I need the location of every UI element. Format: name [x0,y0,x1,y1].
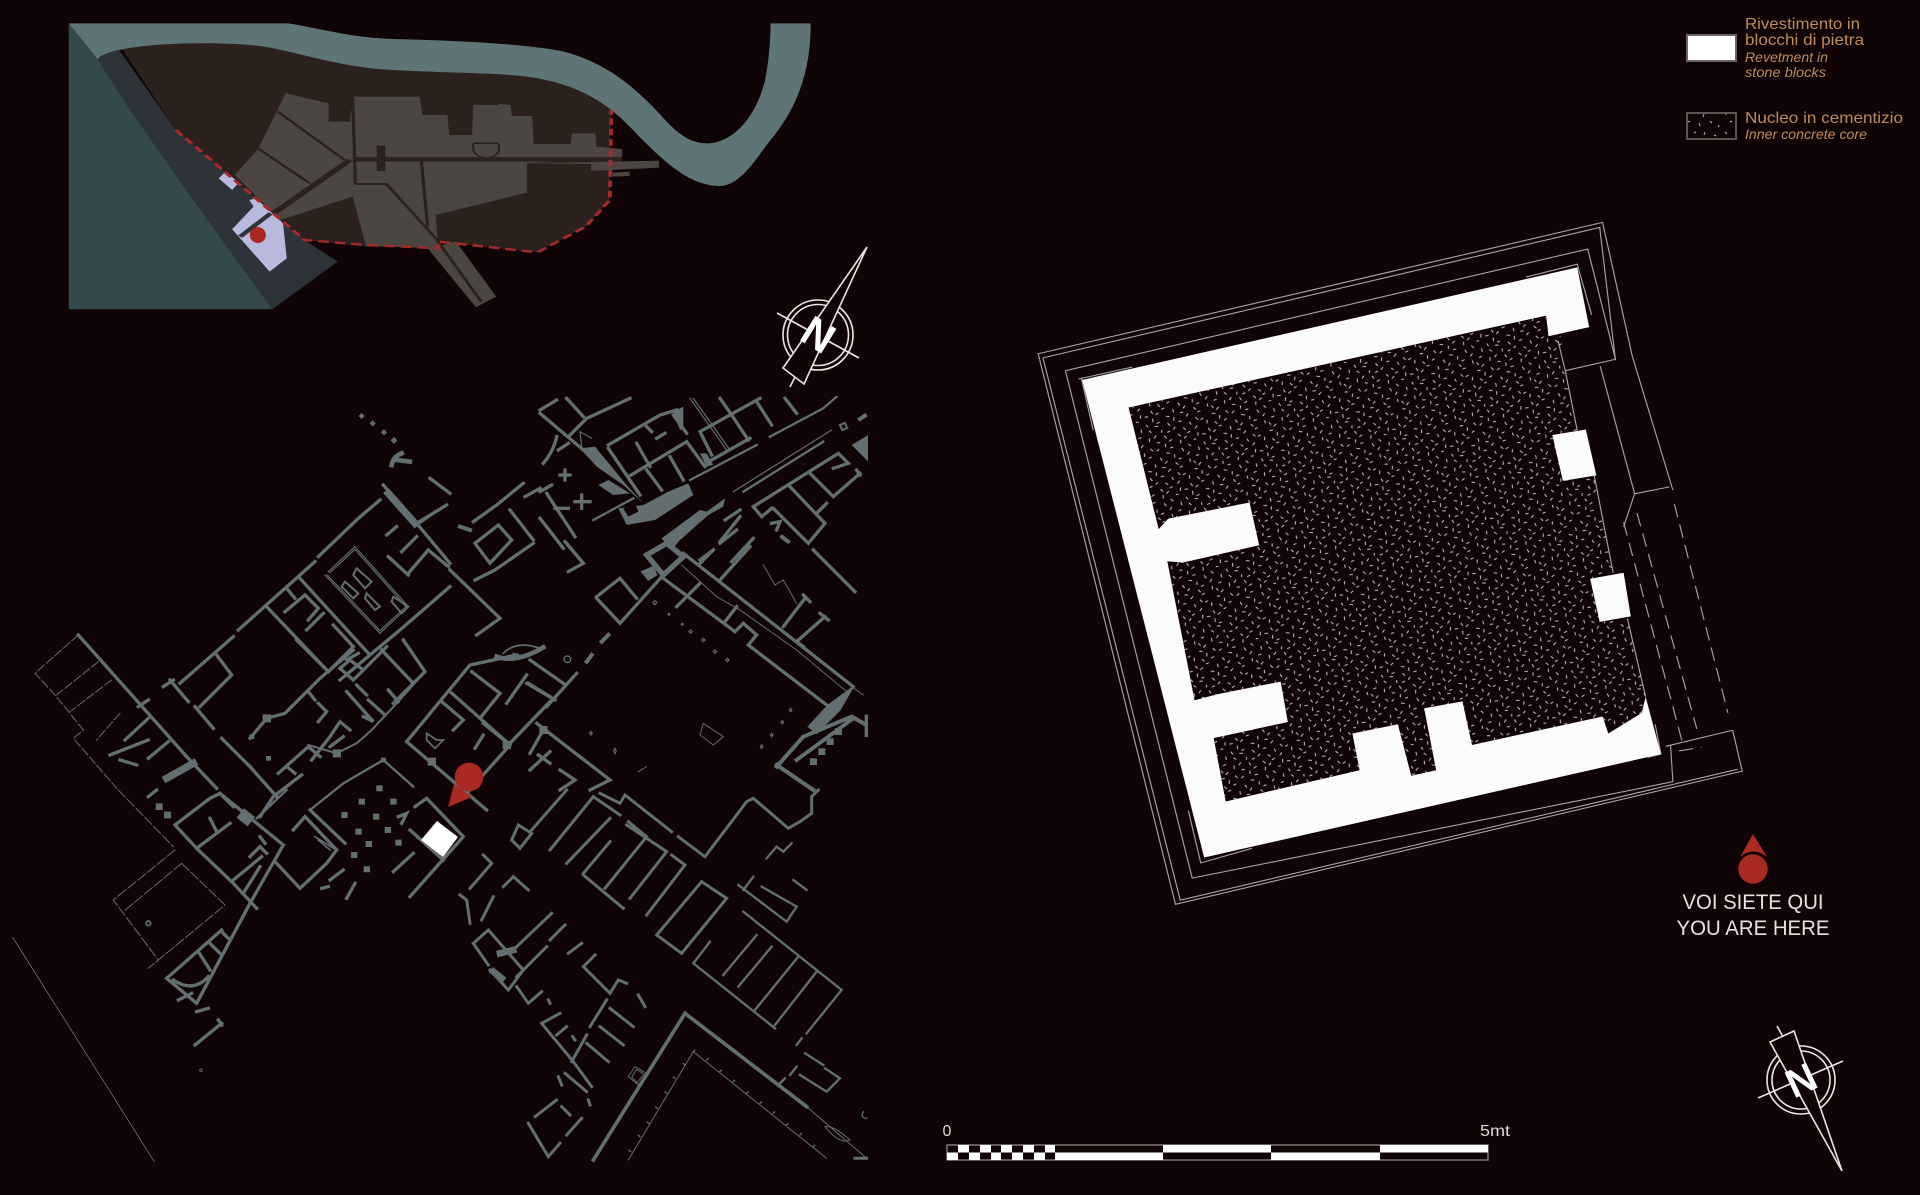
legend text: concrete core [1745,110,1903,142]
compass letter: N [1779,1055,1824,1107]
scale bar [943,1123,1511,1160]
location marker [250,227,266,243]
monument area [219,172,287,272]
legend swatch: revetment [1687,35,1736,61]
compass letter: N [793,307,844,363]
shore strip [98,43,338,309]
city blocks [235,93,659,307]
you are here label [1676,891,1830,940]
scale start label: 0 [943,1123,952,1140]
land area [122,37,611,252]
map marker: you are here [448,763,483,807]
map central detail [250,640,550,898]
legend text: revetment: Rivestimento in [1745,16,1860,33]
map south-west [13,790,283,1162]
you are here label: VOI SIETE QUI [1682,891,1824,914]
stone block revetment [1082,267,1661,857]
outer boundary lines [1038,222,1742,904]
map top-right detail [540,397,868,563]
legend swatch: concrete core [1687,113,1736,139]
compass: upper north arrow [777,247,867,387]
monument plan [1038,222,1742,904]
concrete core [1129,316,1646,801]
legend text: concrete core: Inner concrete core [1745,127,1867,142]
you are here legend icon [1738,834,1768,884]
sea [69,23,272,309]
legend [1687,16,1903,142]
main map of the excavations [13,397,868,1162]
legend text: revetment [1745,16,1864,80]
legend text: revetment: Revetment in [1745,50,1828,65]
site boundary [176,110,611,252]
map north-west [35,414,450,788]
legend text: revetment: stone blocks [1745,65,1826,80]
inset location map [69,23,811,309]
map south-east [460,790,867,1160]
piers [1552,429,1631,622]
legend text: revetment: blocchi di pietra [1745,32,1864,49]
map north-east [450,483,867,790]
monument highlight on map [421,821,458,857]
river [69,23,811,186]
you are here label: YOU ARE HERE [1676,917,1830,940]
legend text: concrete core: Nucleo in cementizio [1745,110,1903,127]
scale end label: 5mt [1480,1123,1511,1140]
compass: lower north arrow [1758,1026,1843,1171]
